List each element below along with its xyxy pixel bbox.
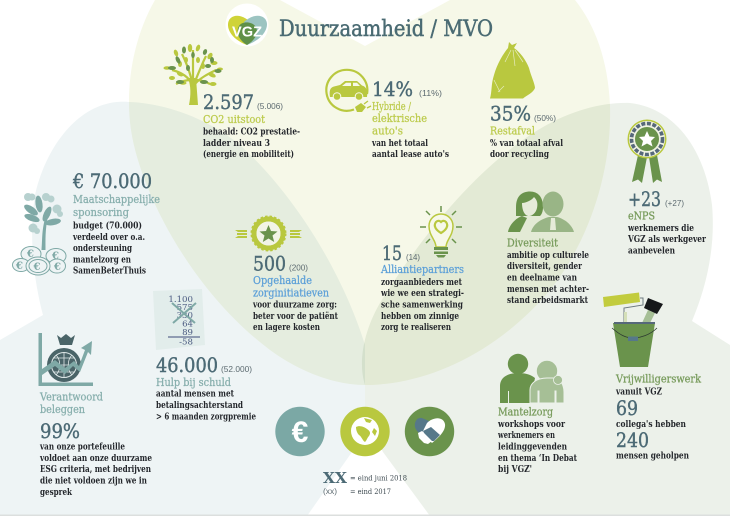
stat: debt help: aantal mensen met <box>156 390 235 400</box>
icon: money tree <box>12 193 66 275</box>
stat: alliance partners <box>380 241 464 333</box>
stat: responsible investing: gesprek <box>40 488 73 498</box>
stat: eNPS: VGZ als werkgever <box>627 235 706 245</box>
stat: sponsoring: sponsoring <box>73 206 129 219</box>
stat: responsible investing: Verantwoord <box>39 391 103 404</box>
icon: calculation paper: 89 <box>182 328 193 338</box>
legend: (xx) <box>323 487 337 496</box>
stat: alliance partners: wie we een strategi- <box>380 289 464 299</box>
stat: responsible investing: die niet voldoen zijn we in <box>40 476 147 486</box>
icon: paint bucket <box>603 292 663 367</box>
icon: diversity people <box>508 192 574 232</box>
stat: caregiving: werknemers en <box>497 431 555 441</box>
title: Duurzaamheid / MVO <box>279 17 493 42</box>
stat: caregiving: workshops voor <box>497 420 565 430</box>
stat: sponsoring: SamenBeterThuis <box>73 266 146 276</box>
stat: alliance partners: zorg te realiseren <box>381 323 451 333</box>
icon: electric car <box>326 70 371 112</box>
stat: caregiving: bij VGZ' <box>498 465 532 475</box>
stat: hybrid cars: auto's <box>372 124 403 138</box>
stat: diversity: stand arbeidsmarkt <box>507 296 589 306</box>
stat: diversity: diversiteit, gender <box>507 262 582 272</box>
icon: money tree: € <box>32 262 40 273</box>
legend <box>323 469 407 496</box>
icon: euro circle: € <box>292 416 309 449</box>
stat: eNPS: +23 <box>628 187 661 211</box>
stat: initiatives: en lagere kosten <box>253 323 320 333</box>
icon: calculation paper: -58 <box>179 338 193 348</box>
stat: hybrid cars: (11%) <box>419 89 442 98</box>
icon: euro circle <box>275 407 325 456</box>
legend: XX <box>323 469 347 487</box>
stat: alliance partners: sche samenwerking <box>381 300 463 310</box>
stat: volunteering: Vrijwilligerswerk <box>615 373 701 386</box>
stat: initiatives: zorginitiatieven <box>253 286 329 300</box>
stat: hybrid cars: 14% <box>372 77 413 101</box>
icon: calculation paper: 330 <box>177 311 193 321</box>
icon: handshake circle <box>405 407 454 456</box>
stat: CO2 <box>203 90 300 160</box>
icon: tree <box>164 44 223 105</box>
stat: eNPS: werknemers die <box>627 224 694 234</box>
stat: debt help <box>156 353 256 422</box>
stat: responsible investing: 99% <box>40 419 80 443</box>
icon: garbage bag <box>490 42 535 98</box>
stat: CO2: CO2 uitstoot <box>203 113 266 126</box>
stat: responsible investing: ESG criteria, met bedrijven <box>40 465 151 475</box>
logo <box>226 4 268 46</box>
stat: caregiving: leidinggevenden <box>498 442 568 452</box>
stat: initiatives: beter voor de patiënt <box>253 311 339 322</box>
stat: alliance partners: (14) <box>406 253 420 262</box>
stat: debt help: 46.000 <box>156 353 218 377</box>
stat: initiatives <box>252 252 339 333</box>
stat: diversity: mensen met achter- <box>507 285 589 295</box>
stat: CO2: (5.006) <box>257 102 283 111</box>
stat: initiatives: (200) <box>289 264 308 272</box>
stat: responsible investing: voldoet aan onze duurzame <box>39 454 152 464</box>
stat: alliance partners: Alliantiepartners <box>380 263 464 276</box>
icon: calculation paper: 1.100 <box>168 295 193 305</box>
logo: VGZ <box>232 24 262 40</box>
stat: sponsoring: ondersteuning <box>73 244 132 254</box>
legend: = eind 2017 <box>350 487 391 496</box>
stat: caregiving: en thema ‘In Debat <box>498 454 578 464</box>
stat: caregiving <box>497 406 578 475</box>
stat: sponsoring: € 70.000 <box>72 169 152 193</box>
icon: light bulb <box>420 206 462 258</box>
icon: money tree: € <box>15 261 23 272</box>
stat: responsible investing: van onze portefeuille <box>39 443 125 453</box>
stat: diversity <box>507 237 589 306</box>
stat: alliance partners: 15 <box>382 241 402 265</box>
stat: eNPS: (+27) <box>665 199 684 208</box>
icon: caregivers <box>500 354 564 403</box>
stat: sponsoring: mantelzorg en <box>73 256 131 266</box>
stat: sponsoring <box>72 169 160 276</box>
stat: initiatives: voor duurzame zorg: <box>252 300 337 310</box>
icon: calculation paper: 64 <box>182 320 194 330</box>
stat: volunteering: mensen geholpen <box>616 452 690 462</box>
stat: waste: % van totaal afval <box>490 139 564 149</box>
icon: rosette <box>628 120 666 183</box>
stat: volunteering: 240 <box>616 428 649 452</box>
stat: volunteering: 69 <box>616 396 638 420</box>
stat: waste: Restafval <box>490 124 535 138</box>
stat: CO2: behaald: CO2 prestatie- <box>203 128 300 138</box>
stat: eNPS: eNPS <box>628 210 655 222</box>
icon: money bag and growth chart <box>38 333 93 386</box>
icon: globe circle <box>340 407 390 456</box>
icon: calculation paper: 575 <box>177 303 193 313</box>
stat: sponsoring: verdeeld over o.a. <box>72 233 145 243</box>
stat: caregiving: Mantelzorg <box>498 406 553 419</box>
stat: responsible investing <box>39 391 152 498</box>
icon: money tree: € <box>53 262 61 273</box>
stat: waste <box>490 102 564 160</box>
stat: initiatives: Opgehaalde <box>253 274 312 287</box>
stat: hybrid cars: Hybride / <box>372 100 411 113</box>
stat: volunteering: collega's hebben <box>616 420 687 430</box>
stat: hybrid cars: elektrische <box>372 112 427 125</box>
stat: diversity: ambitie op culturele <box>507 251 589 261</box>
legend: = eind juni 2018 <box>350 474 407 483</box>
stat: debt help: Hulp bij schuld <box>156 376 231 389</box>
icon: money tree: € <box>51 251 59 262</box>
stat: sponsoring: Maatschappelijke <box>73 193 160 206</box>
stat: CO2: (energie en mobiliteit) <box>203 149 294 160</box>
icon: calculation paper <box>153 289 205 350</box>
stat: CO2: ladder niveau 3 <box>203 139 270 149</box>
stat: hybrid cars: van het totaal <box>371 139 429 149</box>
icon: laurel badge <box>235 216 302 250</box>
stat: volunteering: vanuit VGZ <box>615 388 662 398</box>
stat: initiatives: 500 <box>253 252 286 276</box>
icon: money tree: € <box>26 249 34 260</box>
stat: waste: (50%) <box>534 114 556 123</box>
stat: debt help: > 6 maanden zorgpremie <box>156 412 256 422</box>
stat: volunteering <box>615 373 701 462</box>
stat: hybrid cars: aantal lease auto's <box>372 150 449 160</box>
stat: CO2: 2.597 <box>203 90 254 114</box>
stat: alliance partners: zorgaanbieders met <box>381 278 463 288</box>
stat: alliance partners: hebben om zinnige <box>381 312 459 322</box>
stat: diversity: en deelname van <box>507 274 578 284</box>
stat: hybrid cars <box>371 77 449 160</box>
stat: waste: door recycling <box>490 150 549 160</box>
stat: eNPS: aanbevelen <box>628 246 676 256</box>
stat: sponsoring: budget (70.000) <box>73 220 142 232</box>
stat: waste: 35% <box>490 102 531 126</box>
stat: debt help: betalingsachterstand <box>156 401 243 411</box>
stat: responsible investing: beleggen <box>40 403 85 416</box>
stat: debt help: (52.000) <box>221 365 252 374</box>
stat: eNPS <box>627 187 706 256</box>
stat: diversity: Diversiteit <box>507 237 559 250</box>
